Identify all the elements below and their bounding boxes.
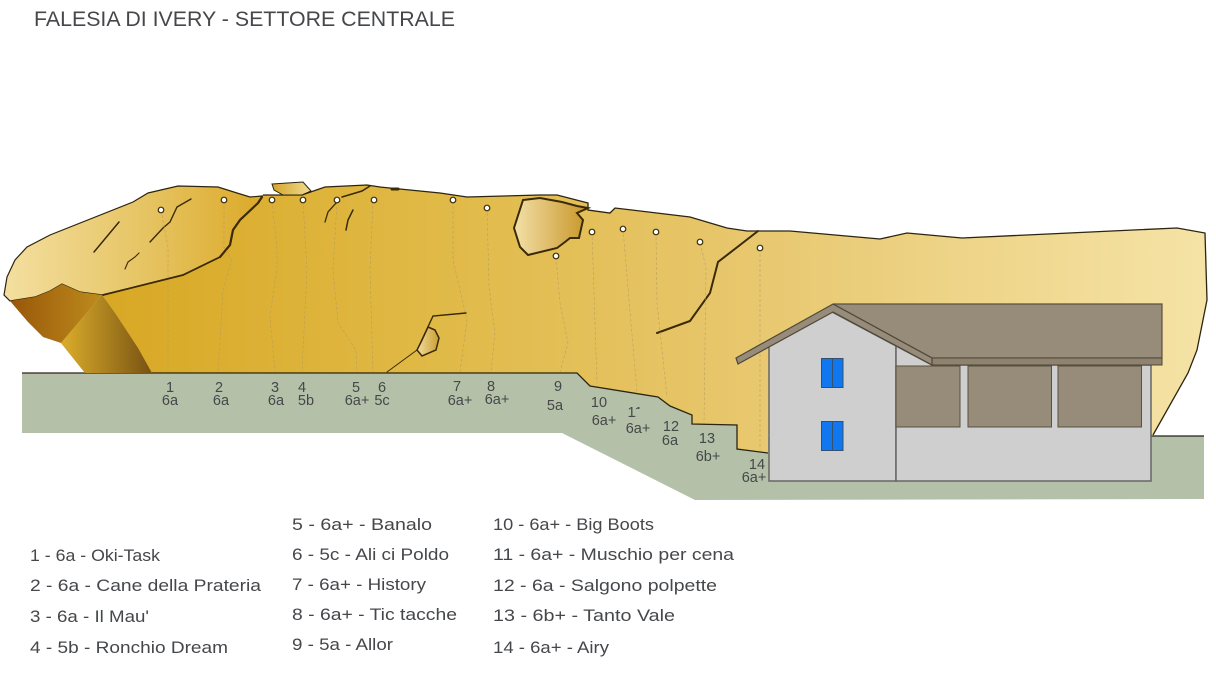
- cracks: [94, 186, 758, 372]
- route numbers and grades: 5: [352, 380, 360, 396]
- legend column 3: 13 - 6b+ - Tanto Vale: [493, 607, 675, 625]
- route numbers and grades: 6a: [213, 393, 230, 409]
- route numbers and grades: 6a+: [626, 421, 650, 437]
- route numbers and grades: 6a+: [592, 413, 616, 429]
- route numbers and grades: 5c: [374, 393, 390, 409]
- route numbers and grades: 6a+: [485, 392, 509, 408]
- legend column 1: 3 - 6a - Il Mau': [30, 608, 149, 626]
- house long wall: [896, 346, 1151, 481]
- house gable wall: [769, 312, 896, 481]
- route numbers and grades: 6a+: [742, 470, 766, 486]
- route numbers and grades: 3: [271, 380, 279, 396]
- route numbers and grades: 6a: [268, 393, 285, 409]
- route numbers and grades: 10: [591, 395, 607, 411]
- route bolts: [158, 197, 763, 259]
- left shaded buttress: [61, 295, 152, 373]
- legend column 1: 1 - 6a - Oki-Task: [30, 547, 161, 565]
- legend column 3: 11 - 6a+ - Muschio per cena: [493, 546, 735, 564]
- route numbers and grades: 4: [298, 380, 306, 396]
- legend column 1: 4 - 5b - Ronchio Dream: [30, 639, 228, 657]
- route numbers and grades: 9: [554, 379, 562, 395]
- route numbers and grades: 6a: [662, 433, 679, 449]
- small boulder: [417, 327, 439, 356]
- legend column 1: 2 - 6a - Cane della Prateria: [30, 577, 262, 595]
- legend column 3: [493, 516, 735, 657]
- top block: [272, 182, 311, 195]
- route numbers and grades: 8: [487, 379, 495, 395]
- route numbers and grades: 5b: [298, 393, 314, 409]
- main roof: [833, 304, 1162, 358]
- legend column 2: 6 - 5c - Ali ci Poldo: [292, 546, 449, 564]
- gable roof edge: [736, 304, 932, 365]
- label eraser patch: [636, 409, 645, 419]
- route numbers and grades: 6a+: [448, 393, 472, 409]
- ground area: [22, 373, 1204, 500]
- route numbers and grades: 6b+: [696, 449, 720, 465]
- title: FALESIA DI IVERY - SETTORE CENTRALE: [34, 8, 455, 31]
- legend column 1: [30, 547, 262, 657]
- route numbers and grades: 6a+: [345, 393, 369, 409]
- route lines: [161, 201, 760, 450]
- left shaded face: [10, 284, 102, 343]
- route numbers and grades: 12: [663, 419, 679, 435]
- legend column 3: 14 - 6a+ - Airy: [493, 639, 610, 657]
- route numbers and grades: 6: [378, 380, 386, 396]
- route numbers and grades: 14: [749, 457, 765, 473]
- route numbers and grades: 13: [699, 431, 715, 447]
- legend column 2: 8 - 6a+ - Tic tacche: [292, 606, 457, 624]
- legend column 3: 10 - 6a+ - Big Boots: [493, 516, 654, 534]
- rock face: [22, 185, 1207, 453]
- legend column 2: [292, 516, 457, 654]
- route numbers and grades: 6a: [162, 393, 179, 409]
- house: [736, 304, 1162, 481]
- route numbers and grades: 7: [453, 379, 461, 395]
- route numbers and grades: [162, 379, 766, 486]
- legend column 2: 9 - 5a - Allor: [292, 636, 394, 654]
- roof eave: [932, 358, 1162, 365]
- route numbers and grades: 11: [627, 405, 643, 421]
- route numbers and grades: 2: [215, 380, 223, 396]
- blue windows: [822, 358, 843, 450]
- route numbers and grades: 5a: [547, 398, 564, 414]
- route numbers and grades: 1: [166, 380, 174, 396]
- legend column 2: 5 - 6a+ - Banalo: [292, 516, 432, 534]
- large boulder: [514, 198, 588, 255]
- legend column 3: 12 - 6a - Salgono polpette: [493, 577, 717, 595]
- porch openings: [896, 366, 1142, 427]
- legend column 2: 7 - 6a+ - History: [292, 576, 427, 594]
- overhang roof: [4, 186, 262, 301]
